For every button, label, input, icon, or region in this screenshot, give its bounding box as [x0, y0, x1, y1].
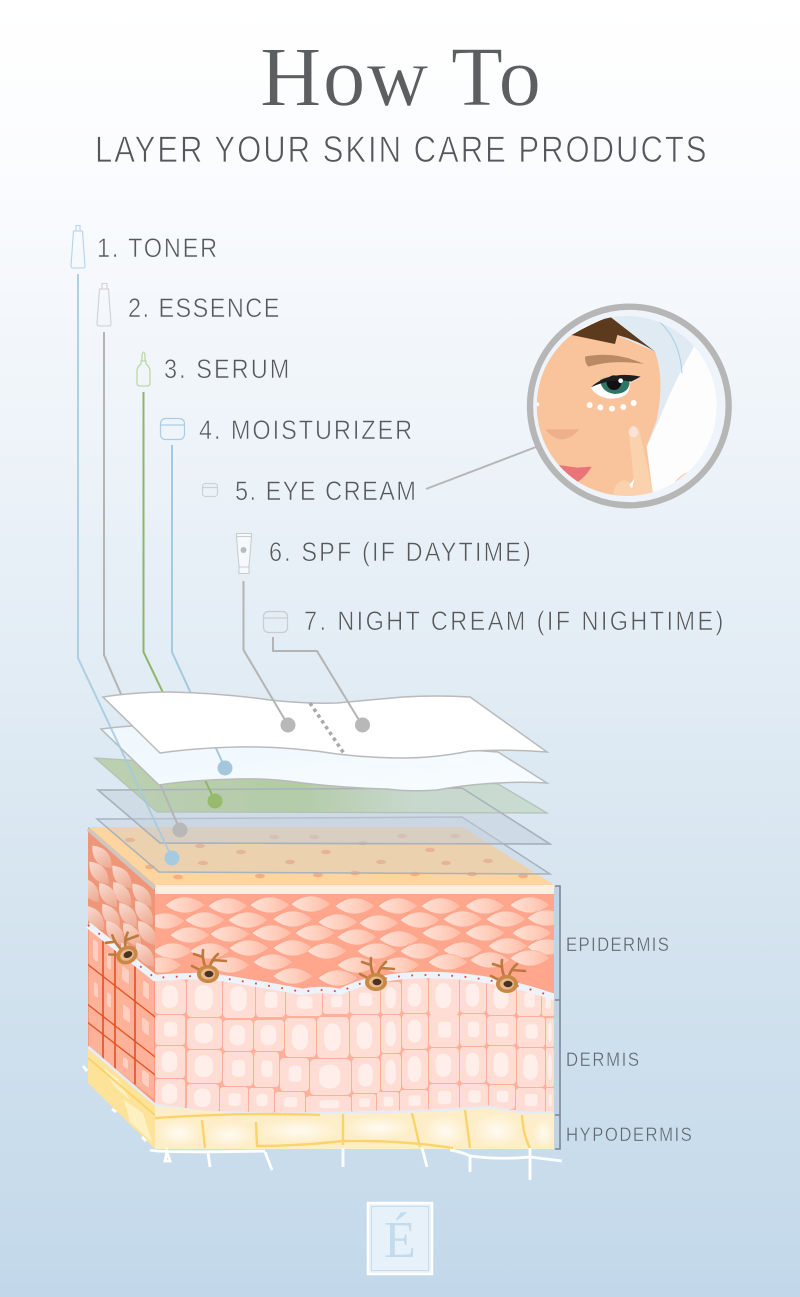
step 1: toner: 1. TONER: [97, 234, 217, 263]
connector: night cream: [273, 637, 370, 732]
step 6: SPF: 6. SPF (IF DAYTIME): [269, 538, 531, 567]
connector: essence: [104, 332, 188, 838]
connector: toner: [78, 274, 180, 866]
step 7: night cream: 7. NIGHT CREAM (IF NIGHTIME): [304, 607, 723, 636]
label: dermis: DERMIS: [566, 1049, 639, 1070]
title: How To: [260, 30, 541, 124]
connector: serum: [144, 392, 222, 808]
face illustration: [533, 313, 720, 503]
hypodermis: [88, 1049, 554, 1149]
step 1: toner: [71, 226, 217, 268]
layer sheet: moisturizer: [101, 726, 547, 791]
layer sheet: toner (blue): [97, 817, 550, 874]
front face: epidermis lens cells: [155, 894, 554, 994]
step list: [71, 226, 723, 636]
magnified face circle: [530, 307, 729, 505]
step 2: essence: [97, 284, 279, 326]
logo: [368, 1203, 432, 1274]
front face: dermis cells: [155, 975, 554, 1114]
subtitle: LAYER YOUR SKIN CARE PRODUCTS: [95, 130, 707, 171]
logo: É: [384, 1211, 416, 1269]
layer bracket: [554, 886, 560, 1149]
label: epidermis: EPIDERMIS: [566, 934, 669, 955]
layer sheet: essence overlay edge: [98, 788, 550, 844]
step 6: SPF: [236, 534, 531, 574]
white fibres below cube: [83, 1066, 562, 1180]
skin cube: [76, 827, 567, 1180]
basal membrane: [88, 925, 554, 1114]
connector: SPF: [244, 581, 296, 732]
layer sheet: SPF / night cream (top): [103, 692, 547, 758]
step 5: eye cream: 5. EYE CREAM: [235, 477, 416, 506]
step 4: moisturizer: 4. MOISTURIZER: [199, 416, 412, 445]
layer sheet: essence (gray): [98, 788, 550, 844]
top surface with pores: [88, 827, 554, 895]
label: hypodermis: HYPODERMIS: [566, 1124, 692, 1145]
divider: day or night: [310, 703, 345, 755]
left face: epidermis: [86, 827, 156, 974]
connector: moisturizer: [172, 445, 232, 776]
layer sheet: serum (green): [95, 758, 547, 813]
melanocytes: [102, 926, 525, 993]
step 2: essence: 2. ESSENCE: [128, 294, 279, 323]
step 3: serum: 3. SERUM: [164, 355, 289, 384]
leader line from eye cream to face: [426, 447, 536, 489]
left face: dermis: [88, 925, 155, 1105]
